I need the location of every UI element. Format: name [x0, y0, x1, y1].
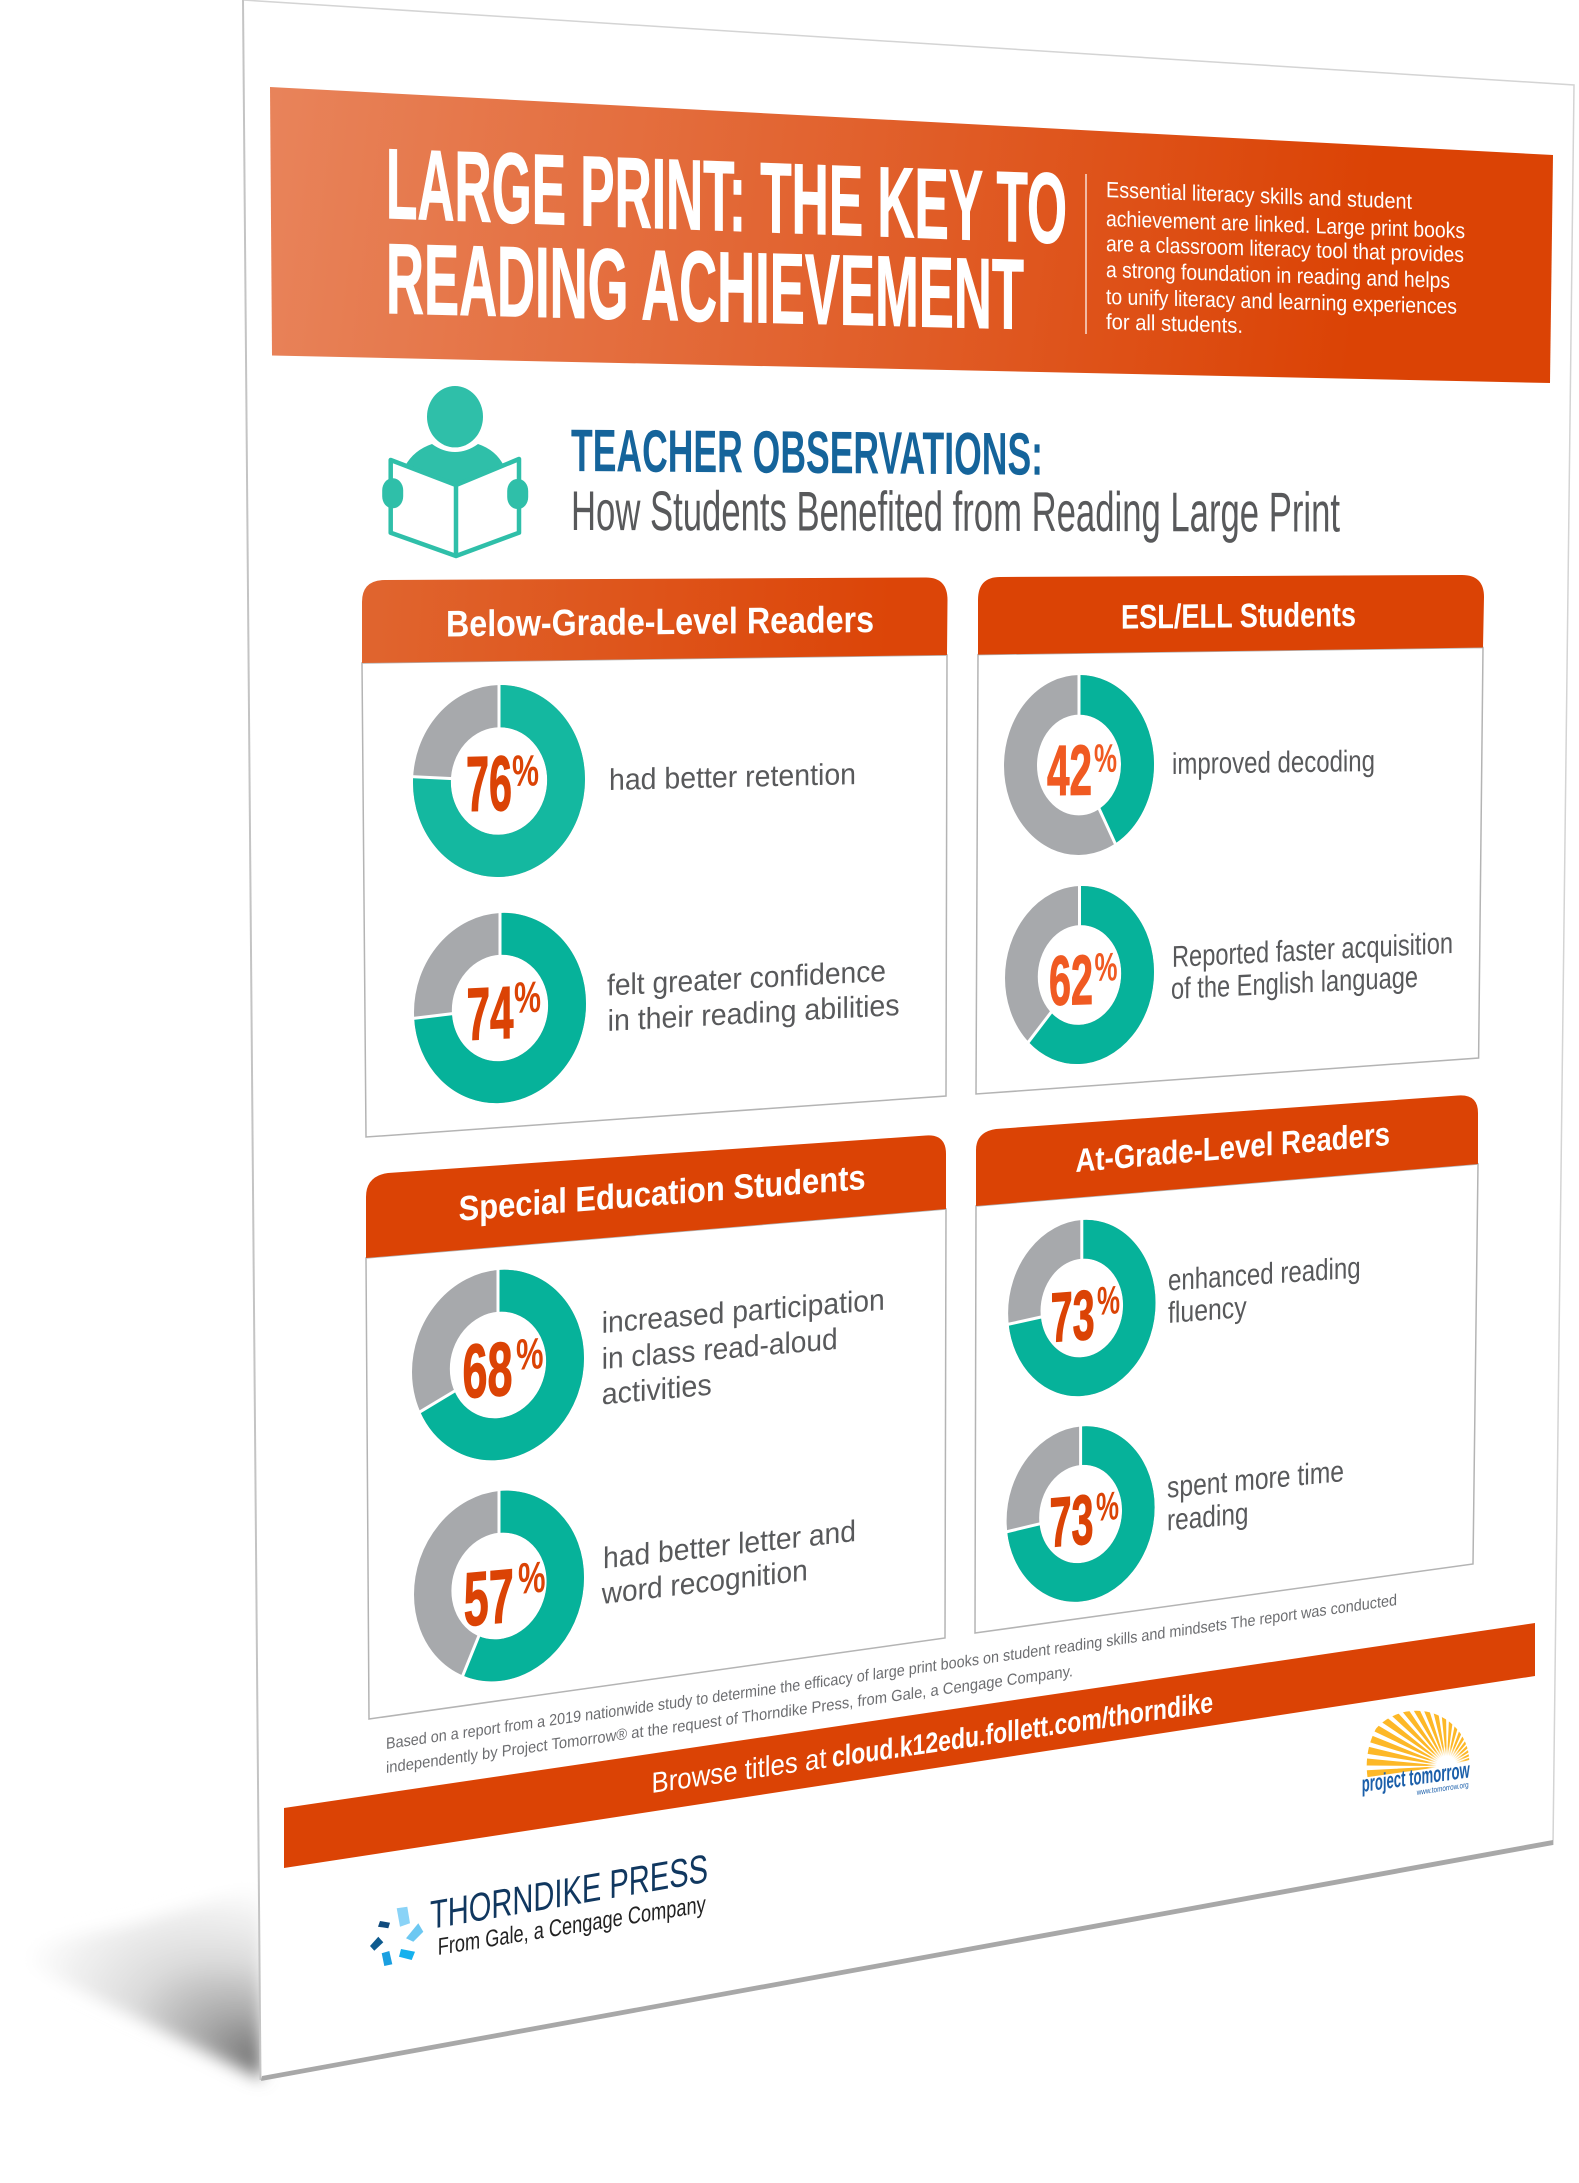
intro paragraph: to unify literacy and learning experiences: [1106, 284, 1457, 319]
label: [602, 1284, 885, 1411]
panel: at-grade-level readers: At-Grade-Level Readers: [1076, 1116, 1390, 1180]
donut: 42 percent: [1020, 673, 1138, 846]
intro paragraph: for all students.: [1106, 309, 1243, 338]
donut: 76 percent: [411, 682, 566, 858]
label: spent more time: [1167, 1455, 1344, 1505]
label: word recognition: [601, 1554, 808, 1611]
label: enhanced reading: [1168, 1251, 1361, 1297]
intro paragraph: a strong foundation in reading and helps: [1106, 257, 1450, 293]
donut: 68 percent: [419, 1263, 565, 1445]
heading: teacher observations: [571, 417, 1340, 544]
intro paragraph: are a classroom literacy tool that provides: [1106, 231, 1464, 267]
title: [386, 128, 1067, 351]
label: had better retention: [609, 758, 856, 797]
banner: [270, 87, 1553, 383]
label: activities: [602, 1369, 712, 1411]
panel: special education students: [366, 1135, 946, 1719]
call to action strip: Browse titles at: [652, 1743, 826, 1800]
stat: 57%: 57: [464, 1554, 514, 1643]
intro paragraph: Essential literacy skills and student: [1106, 177, 1412, 214]
panel: below-grade-level readers: Below-Grade-Level Readers: [446, 599, 874, 644]
label: improved decoding: [1172, 745, 1375, 781]
stat: 62%: %: [1094, 945, 1118, 990]
panel: ESL/ELL students: [976, 575, 1484, 1094]
stat: 68%: 68: [462, 1327, 512, 1415]
panel: below-grade-level readers: [362, 577, 948, 1137]
logo: project tomorrow: www.tomorrow.org: [1416, 1780, 1469, 1797]
label: increased participation: [602, 1284, 885, 1340]
donut: 73 percent time: [1006, 1420, 1138, 1589]
stat: 62%: 62: [1049, 941, 1093, 1020]
stat: 57%: %: [518, 1553, 546, 1604]
logo: thorndike press: From Gale, a Cengage Company: [438, 1891, 706, 1961]
heading: teacher observations: TEACHER OBSERVATIONS:: [571, 417, 1043, 488]
intro paragraph: achievement are linked. Large print books: [1106, 206, 1465, 243]
label: of the English language: [1171, 961, 1418, 1006]
label: [1167, 1455, 1344, 1537]
label: reading: [1167, 1497, 1248, 1537]
donut: 57 percent: [433, 1482, 565, 1680]
label: fluency: [1168, 1291, 1247, 1330]
donut: 62 percent: [1021, 882, 1138, 1047]
logo: project tomorrow: project tomorrow: [1362, 1756, 1470, 1797]
label: had better letter and: [603, 1515, 856, 1575]
page shadow: [0, 1885, 262, 2080]
stat: 73%: 73: [1051, 1276, 1095, 1357]
logo: project tomorrow: [1362, 1710, 1470, 1797]
label: Reported faster acquisition: [1172, 927, 1453, 974]
stat: 42%: 42: [1047, 732, 1092, 811]
stat: 74%: 74: [466, 971, 514, 1056]
panel: special education students: Special Education Students: [459, 1158, 866, 1229]
label: in class read-aloud: [602, 1323, 838, 1376]
panel: at-grade-level readers: [975, 1095, 1478, 1633]
panel: ESL/ELL students: ESL/ELL Students: [1121, 596, 1356, 637]
title: READING ACHIEVEMENT: [386, 223, 1024, 351]
stat: 73%: 73: [1050, 1480, 1094, 1562]
intro paragraph: [1106, 177, 1465, 338]
label: [601, 1515, 856, 1611]
stat: 76%: %: [512, 746, 539, 796]
call to action strip: [284, 1623, 1535, 1868]
label: [1168, 1251, 1361, 1330]
stat: 68%: %: [516, 1329, 544, 1380]
donut: 74 percent: [412, 908, 567, 1086]
label: [607, 955, 900, 1038]
stat: 74%: %: [514, 973, 541, 1023]
donut: 73 percent fluency: [1007, 1214, 1139, 1382]
logo: thorndike press: THORNDIKE PRESS: [430, 1846, 708, 1938]
source note: Based on a report from a 2019 nationwide study to determine the efficacy of large print books on student reading skills and mindsets The report was conducted: [386, 1591, 1397, 1753]
label: [1171, 927, 1453, 1006]
logo: thorndike press: [370, 1846, 708, 1966]
source note: independently by Project Tomorrow® at the request of Thorndike Press, from Gale, a Cengage Company.: [386, 1662, 1073, 1777]
call to action strip: cloud.k12edu.follett.com/thorndike: [832, 1687, 1213, 1774]
label: in their reading abilities: [608, 989, 900, 1038]
stat: 76%: 76: [466, 739, 512, 828]
stat: 73%: %: [1096, 1484, 1119, 1530]
icon: student reading a book: [382, 386, 528, 556]
stat: 42%: %: [1094, 737, 1117, 781]
stat: 73%: %: [1097, 1278, 1120, 1324]
label: felt greater confidence: [607, 955, 886, 1002]
